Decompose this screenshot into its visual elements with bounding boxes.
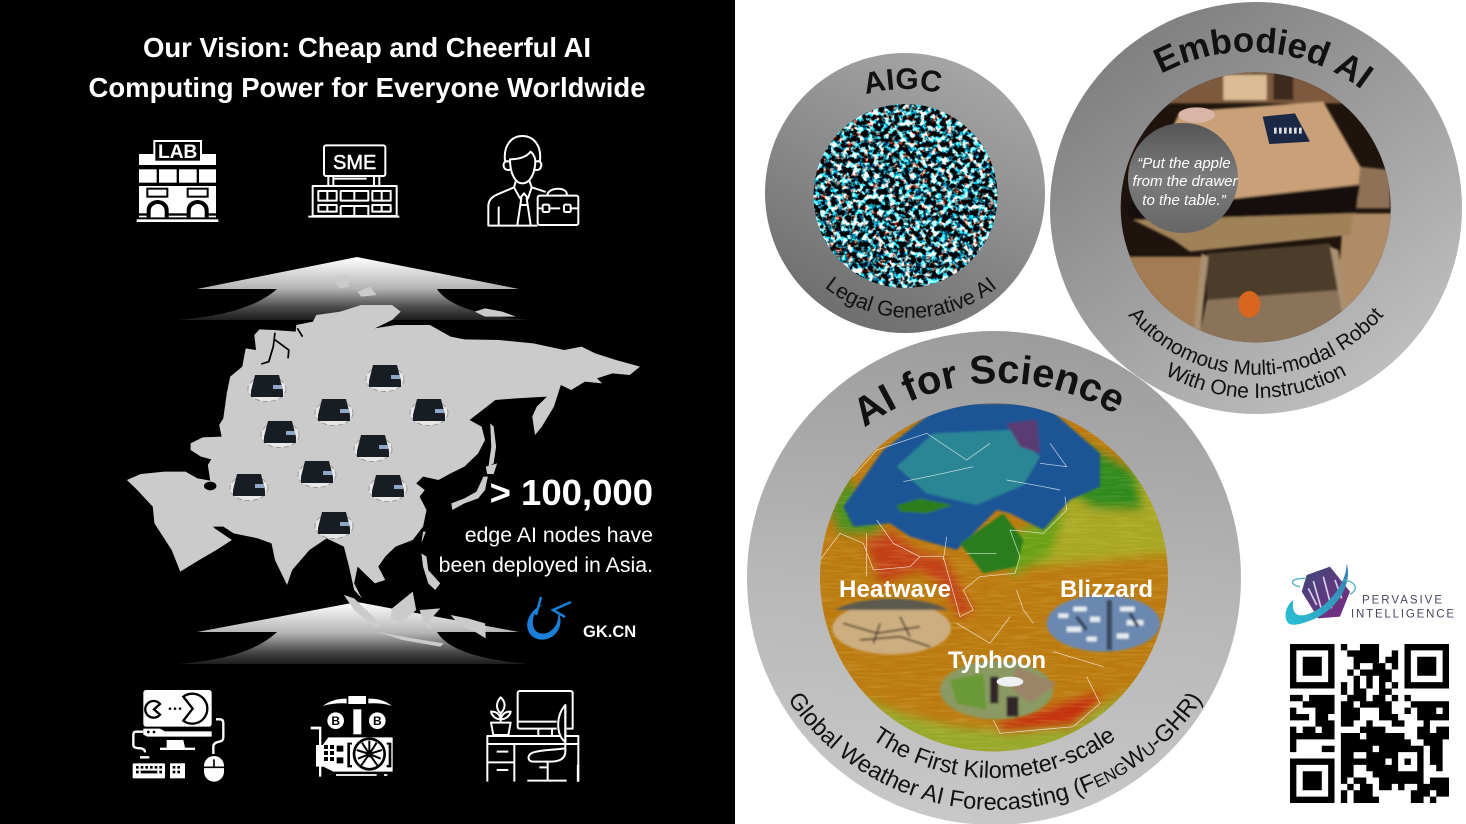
node 10 — [315, 512, 353, 538]
image: robot desk scene — [1110, 70, 1400, 350]
photo: heatwave — [832, 599, 951, 654]
QR code — [1290, 644, 1449, 803]
panel: vision — [0, 0, 735, 824]
callout: deployed node count: > 100,000 — [490, 472, 653, 513]
node 9 — [369, 475, 407, 502]
map: Asia — [127, 275, 640, 647]
heading: AIGC: AIGC — [866, 68, 942, 94]
logo: Pervasive Intelligence — [1286, 563, 1454, 625]
caption: Autonomous Multi-modal Robot: Autonomous Multi-modal Robot — [1128, 308, 1384, 375]
callout: deployed node count: been deployed in Asia. — [439, 553, 653, 577]
icon: lab building — [137, 141, 218, 222]
title: Our Vision: Cheap and Cheerful AI — [143, 32, 591, 63]
label: Blizzard: Blizzard — [1060, 576, 1153, 603]
node 2 — [366, 365, 404, 392]
icon: businessperson with briefcase — [488, 136, 578, 226]
icon: GPU card — [311, 696, 393, 777]
logo: Pervasive Intelligence: INTELLIGENCE — [1351, 608, 1454, 620]
logo: Pervasive Intelligence: PERVASIVE — [1362, 594, 1442, 606]
title — [88, 32, 646, 103]
panel: AI for Science — [747, 331, 1241, 824]
icon: home office desk — [487, 691, 578, 782]
caption: Global Weather AI Forecasting: Global Weather AI Forecasting (FengWu-GHR) — [790, 694, 1204, 810]
heading: Embodied AI: Embodied AI — [1152, 28, 1374, 88]
node 4 — [410, 399, 448, 426]
callout: robot instruction bubble: to the table.” — [1142, 192, 1227, 209]
node 8 — [230, 474, 268, 500]
caption: Legal Generative AI: Legal Generative AI — [826, 276, 996, 318]
icon: GPU card: B — [331, 714, 340, 728]
callout: deployed node count — [439, 472, 653, 577]
logo: GK.CN — [527, 597, 636, 641]
node 3 — [315, 399, 353, 426]
node 7 — [298, 461, 336, 488]
callout: robot instruction bubble: from the drawer — [1132, 173, 1239, 190]
logo: GK.CN: GK.CN — [583, 623, 636, 641]
label: Typhoon: Typhoon — [948, 647, 1046, 674]
photo: typhoon — [940, 661, 1057, 719]
edge AI nodes — [230, 365, 448, 538]
arrow: lower gradient arrow — [178, 602, 530, 664]
node 1 — [248, 375, 286, 402]
photo: blizzard — [1047, 595, 1160, 652]
panel: Embodied AI — [1050, 2, 1462, 414]
icon: lab building: LAB — [158, 142, 197, 163]
node 5 — [261, 421, 299, 448]
icon: gaming computer — [133, 690, 224, 782]
chart: weather globe — [810, 400, 1180, 760]
heading: AI for Science: AI for Science — [858, 355, 1122, 428]
caption: With One Instruction: With One Instruction — [1168, 362, 1346, 398]
label: Heatwave: Heatwave — [839, 576, 951, 603]
icon: SME building: SME — [333, 152, 376, 174]
icon: GPU card: B — [373, 714, 382, 728]
icon: SME building — [308, 145, 399, 217]
callout: robot instruction bubble: “Put the apple — [1137, 155, 1231, 172]
image: generative noise — [810, 100, 1001, 292]
node 6 — [354, 435, 392, 462]
callout: deployed node count: edge AI nodes have — [465, 523, 653, 547]
title: Computing Power for Everyone Worldwide — [88, 72, 646, 103]
callout: robot instruction bubble — [1128, 123, 1239, 233]
panel: AIGC — [765, 53, 1045, 333]
arrow: upper gradient arrow — [178, 257, 530, 320]
caption: The First Kilometer-scale: The First Kilometer-scale — [876, 726, 1114, 778]
